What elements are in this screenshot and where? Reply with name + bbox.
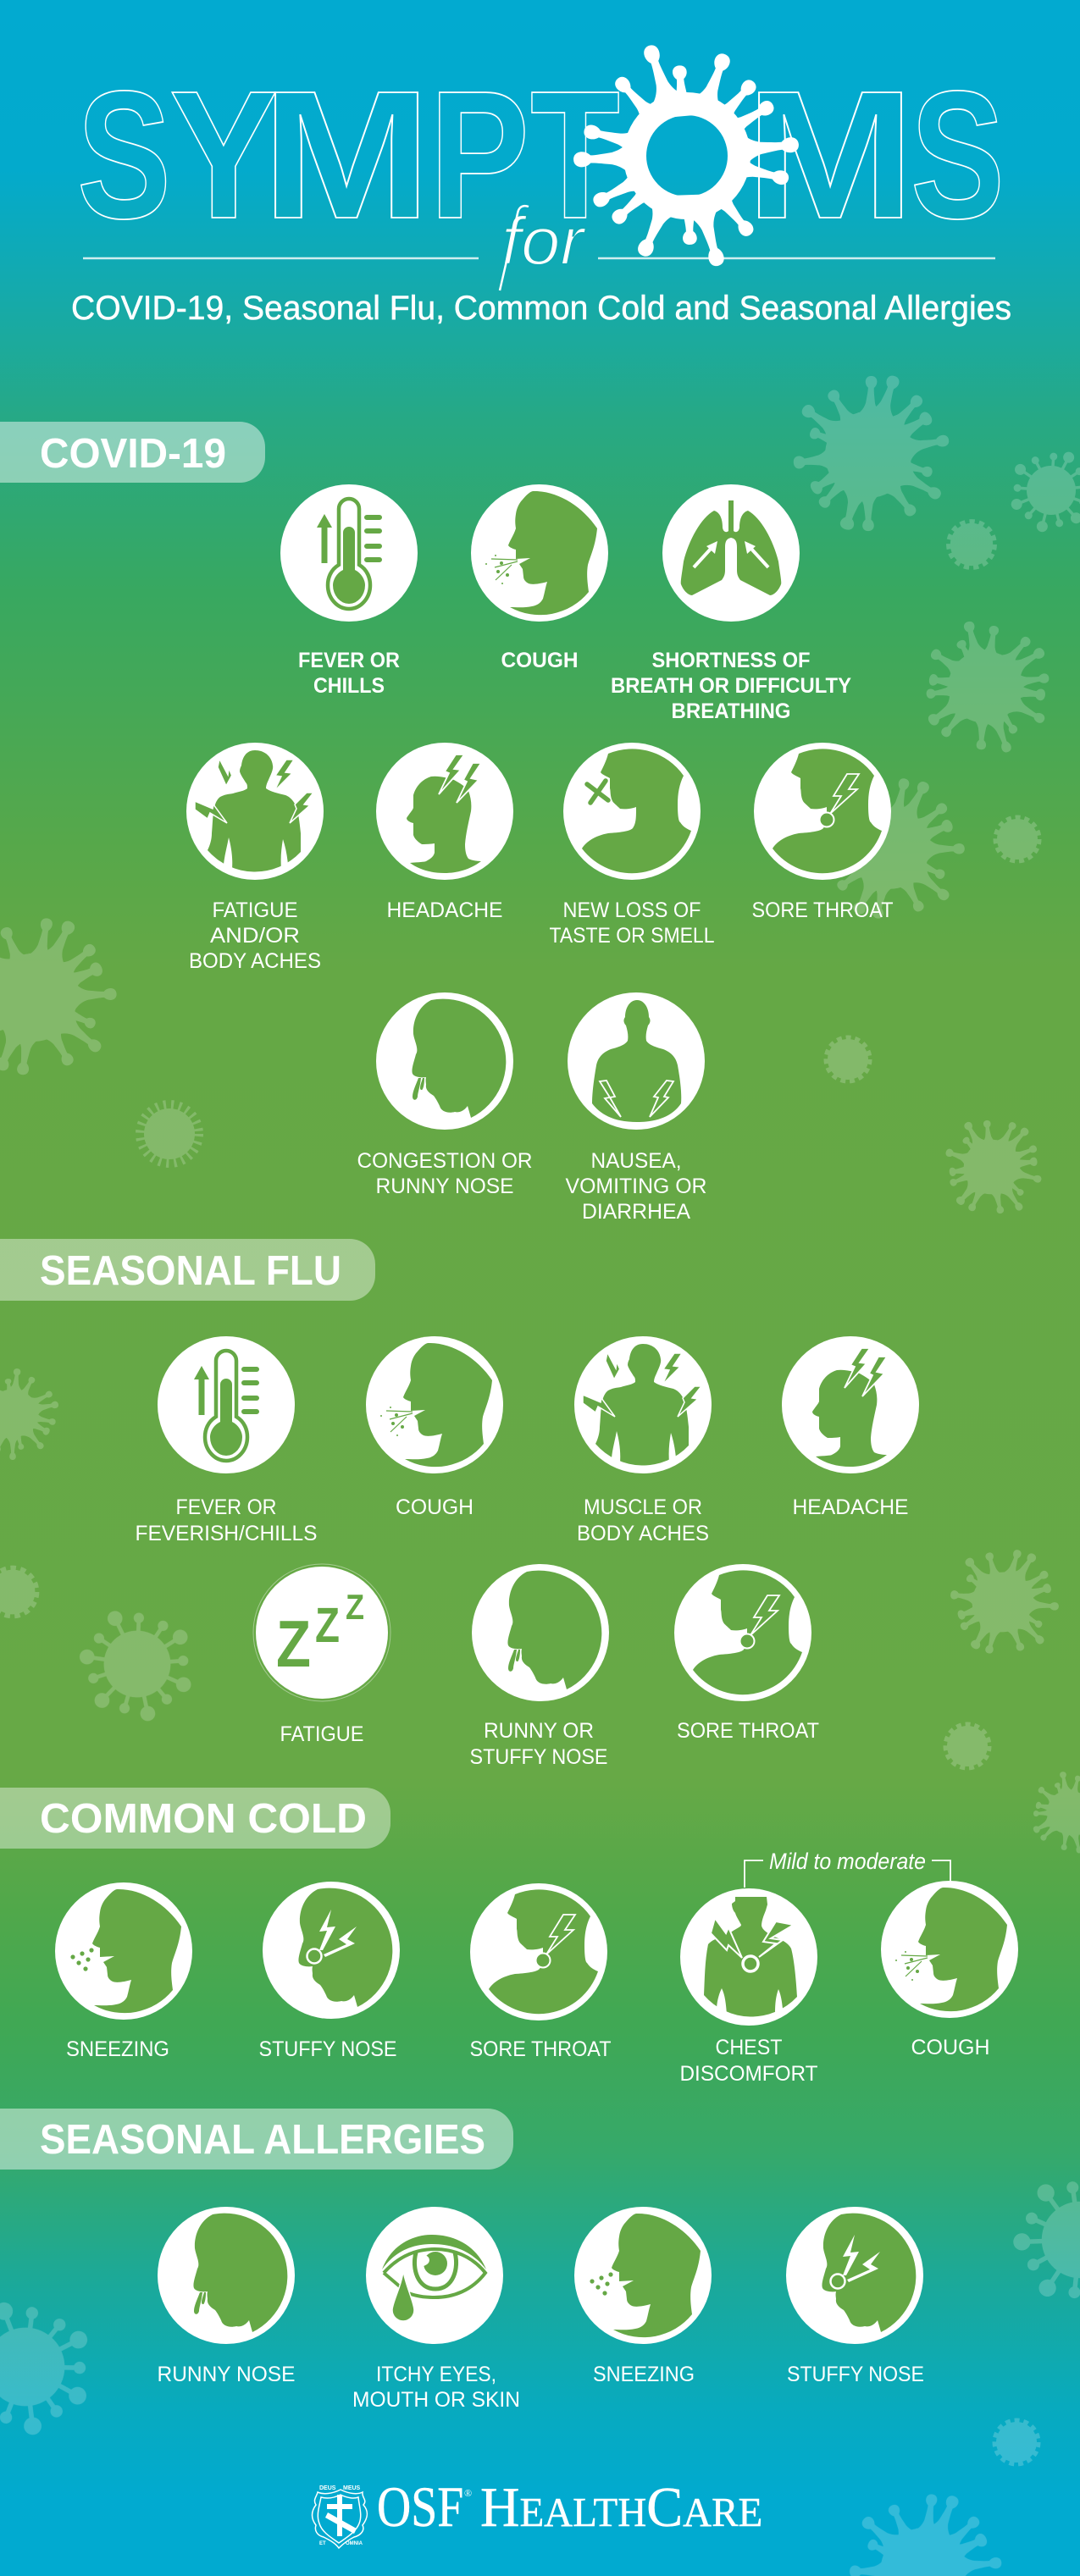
symptom: headache: HEADACHE (793, 1495, 908, 1519)
panel: COVID-19 (0, 422, 893, 1224)
symptom: nausea, vomiting or diarrhea: VOMITING OR (566, 1175, 706, 1198)
symptom: congestion or runny nose (357, 992, 532, 1198)
panel: Seasonal Flu (0, 1239, 919, 1769)
heading: Common Cold (0, 1788, 390, 1849)
symptom: sore throat (752, 743, 893, 922)
symptom: fever or feverish/chills (136, 1336, 317, 1545)
symptom: muscle or body aches: BODY ACHES (577, 1522, 709, 1545)
symptom: stuffy nose (259, 1882, 400, 2061)
symptom: sneezing: SNEEZING (593, 2363, 695, 2386)
icon: crest shield: OMNIA (346, 2541, 363, 2546)
symptom: cough (471, 484, 608, 672)
symptom: fatigue and/or body aches: AND/OR (210, 924, 300, 948)
title: SYMPTOMS (77, 36, 1005, 274)
title: SYMPTOMS: S (911, 53, 1005, 257)
symptom: sore throat: SORE THROAT (469, 2037, 612, 2061)
title divider and word: for: for (501, 203, 586, 279)
symptom: shortness of breath: BREATH OR DIFFICULTY (611, 674, 851, 698)
symptom: sneezing: SNEEZING (66, 2037, 169, 2061)
icon: sleeping Z letters: Z (276, 1606, 311, 1681)
symptom: runny nose (158, 2207, 295, 2386)
symptom: muscle or body aches: MUSCLE OR (584, 1495, 702, 1519)
symptom: itchy eyes, mouth or skin: ITCHY EYES, (376, 2363, 496, 2386)
heading: Seasonal Allergies: SEASONAL ALLERGIES (40, 2117, 485, 2163)
symptom: nausea, vomiting or diarrhea: DIARRHEA (582, 1200, 690, 1224)
icon: sleeping Z letters: Z (315, 1598, 340, 1653)
symptom: runny or stuffy nose: STUFFY NOSE (469, 1745, 608, 1769)
heading: Seasonal Flu (0, 1239, 375, 1301)
symptom: sneezing (55, 1882, 192, 2061)
symptom: shortness of breath (611, 484, 851, 723)
title: SYMPTOMS: Y (169, 53, 278, 257)
symptom: new loss of taste or smell: TASTE OR SMELL (549, 924, 715, 948)
callout: mild to moderate: Mild to moderate (769, 1849, 926, 1874)
symptom: fatigue and/or body aches: BODY ACHES (189, 949, 321, 973)
symptom: cough: COUGH (396, 1495, 474, 1519)
registered mark: ® (464, 2487, 472, 2499)
symptom: sore throat (469, 1883, 612, 2061)
logo wordmark: HealthCare: HEALTHCARE (480, 2476, 762, 2539)
symptom: sore throat: SORE THROAT (677, 1719, 819, 1743)
symptom: headache (376, 743, 513, 922)
symptom: headache (782, 1336, 919, 1519)
symptom: chest discomfort: DISCOMFORT (679, 2062, 818, 2086)
symptom: fatigue and/or body aches (186, 743, 324, 973)
symptom: fatigue and/or body aches: FATIGUE (212, 898, 298, 922)
symptom: sore throat (674, 1564, 819, 1743)
symptom: shortness of breath: BREATHING (671, 699, 791, 723)
symptom: stuffy nose (786, 2207, 924, 2386)
symptom: fatigue: FATIGUE (280, 1722, 364, 1746)
symptom: cough (881, 1881, 1018, 2059)
symptom: stuffy nose: STUFFY NOSE (259, 2037, 396, 2061)
symptom: itchy eyes, mouth or skin: MOUTH OR SKIN (352, 2388, 520, 2412)
symptom: runny or stuffy nose (469, 1564, 609, 1769)
symptom: congestion or runny nose: CONGESTION OR (357, 1149, 532, 1173)
symptom: sneezing (574, 2207, 712, 2386)
symptom: runny nose: RUNNY NOSE (158, 2363, 295, 2386)
symptom: new loss of taste or smell (549, 743, 715, 948)
symptom: cough: COUGH (911, 2036, 989, 2059)
title: SYMPTOMS: M (262, 53, 431, 257)
icon: virus letter O (573, 36, 801, 274)
symptom: sore throat: SORE THROAT (752, 898, 893, 922)
panel: Common Cold (0, 1788, 1018, 2086)
title: SYMPTOMS: P (429, 53, 529, 257)
title: SYMPTOMS: S (77, 53, 171, 257)
symptom: fatigue (253, 1564, 390, 1746)
icon: crest shield: ET (319, 2541, 326, 2546)
symptom: cough: COUGH (501, 649, 578, 672)
symptom: fever or chills (280, 484, 418, 698)
symptom: new loss of taste or smell: NEW LOSS OF (562, 898, 701, 922)
symptom: muscle or body aches (574, 1336, 712, 1545)
symptom: fever or feverish/chills: FEVERISH/CHILLS (136, 1522, 317, 1545)
panel: Seasonal Allergies (0, 2109, 924, 2412)
symptom: headache: HEADACHE (386, 898, 503, 922)
title divider and word: for (83, 203, 995, 290)
subtitle: COVID-19, Seasonal Flu, Common Cold and Seasonal Allergies (71, 290, 1011, 327)
symptom: runny or stuffy nose: RUNNY OR (484, 1719, 594, 1743)
symptom: nausea, vomiting or diarrhea: NAUSEA, (591, 1149, 681, 1173)
icon: crest shield: MEUS (343, 2485, 361, 2491)
symptom: cough (366, 1336, 503, 1519)
logo: OSF HealthCare (312, 2476, 762, 2548)
symptom: itchy eyes, mouth or skin (352, 2207, 520, 2412)
heading: Seasonal Flu: SEASONAL FLU (40, 1248, 341, 1294)
heading: COVID-19 (0, 422, 265, 483)
symptom: congestion or runny nose: RUNNY NOSE (376, 1175, 513, 1198)
symptom: nausea, vomiting or diarrhea (566, 992, 706, 1224)
heading: Seasonal Allergies (0, 2109, 513, 2170)
icon: crest shield: DEUS (319, 2485, 336, 2491)
symptom: fever or chills: FEVER OR (298, 649, 400, 672)
symptom: chest discomfort (679, 1888, 818, 2086)
icon: sleeping Z letters (253, 1564, 390, 1701)
symptom: chest discomfort: CHEST (715, 2036, 783, 2059)
symptom: fever or chills: CHILLS (313, 674, 385, 698)
title: SYMPTOMS: T (530, 53, 620, 257)
icon: crest shield (312, 2485, 367, 2548)
callout: mild to moderate (745, 1849, 950, 1888)
heading: Common Cold: COMMON COLD (40, 1796, 367, 1842)
symptom: fever or feverish/chills: FEVER OR (176, 1495, 276, 1519)
heading: COVID-19: COVID-19 (40, 431, 226, 477)
title: SYMPTOMS: M (745, 53, 915, 257)
icon: sleeping Z letters: Z (346, 1587, 364, 1627)
symptom: shortness of breath: SHORTNESS OF (652, 649, 810, 672)
logo wordmark: OSF: OSF (377, 2476, 463, 2539)
symptom: stuffy nose: STUFFY NOSE (787, 2363, 924, 2386)
